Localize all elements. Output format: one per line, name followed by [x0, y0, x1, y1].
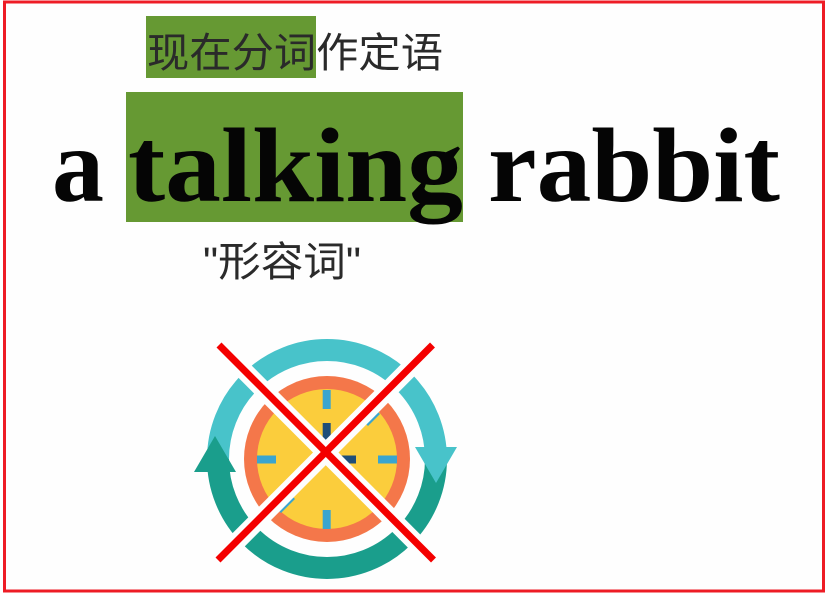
word highlight — [126, 92, 463, 222]
word: talking: talking — [128, 107, 463, 224]
icon: clock rim — [244, 376, 410, 542]
word: a: a — [52, 107, 104, 224]
icon: cycle arrow, light segment — [218, 350, 436, 459]
red cross — [218, 345, 434, 560]
adjective caption: "形容词" — [203, 239, 361, 285]
icon: cycle arrow, dark segment — [194, 436, 436, 568]
icon: right arrowhead — [415, 447, 457, 483]
icon: clock face — [257, 389, 397, 529]
word: rabbit: rabbit — [488, 107, 780, 224]
cross-out gap — [218, 346, 433, 560]
example phrase — [52, 92, 780, 224]
icon: crossed-out clock — [194, 345, 457, 568]
heading: present participle as attributive — [146, 16, 443, 78]
heading text: 现在分词作定语 — [147, 30, 443, 76]
icon: clock ticks — [257, 390, 397, 529]
icon: clock hands — [323, 423, 356, 464]
heading highlight — [146, 16, 316, 78]
